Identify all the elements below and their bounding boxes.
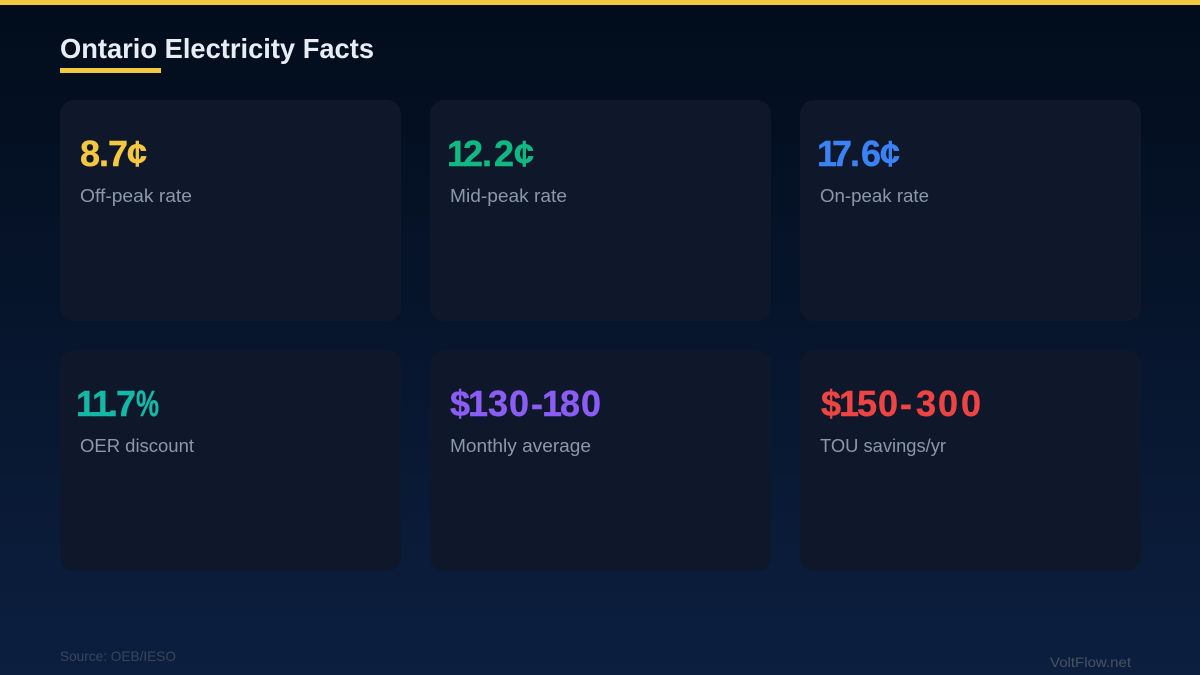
- panel: on-peak rate: 17.6¢: [817, 133, 900, 174]
- top accent bar: [0, 0, 1200, 5]
- panel: TOU savings: TOU savings/yr: [820, 436, 946, 456]
- source note: Source: OEB/IESO: [60, 648, 176, 664]
- panel: mid-peak rate: Mid-peak rate: [450, 186, 567, 206]
- panel: OER discount: [60, 350, 401, 571]
- panel: off-peak rate: 8.7¢: [80, 133, 147, 174]
- panel: OER discount: 11.7: [76, 383, 136, 424]
- panel: on-peak rate: [800, 100, 1141, 321]
- panel: mid-peak rate: 12.2¢: [447, 133, 534, 174]
- panel: monthly average: $130-180: [450, 383, 601, 424]
- title: Ontario Electricity Facts: [60, 33, 374, 64]
- panel: OER discount: OER discount: [80, 436, 194, 456]
- panel: OER discount: %: [136, 383, 159, 424]
- panel: TOU savings: [800, 350, 1141, 571]
- panel: on-peak rate: On-peak rate: [820, 186, 929, 206]
- brand watermark: VoltFlow.net: [1050, 654, 1131, 670]
- panel: monthly average: Monthly average: [450, 436, 591, 456]
- panel: off-peak rate: Off-peak rate: [80, 186, 192, 206]
- panel: TOU savings: $150-300: [821, 383, 981, 424]
- panel: mid-peak rate: [430, 100, 771, 321]
- panel: off-peak rate: [60, 100, 401, 321]
- panel: monthly average: [430, 350, 771, 571]
